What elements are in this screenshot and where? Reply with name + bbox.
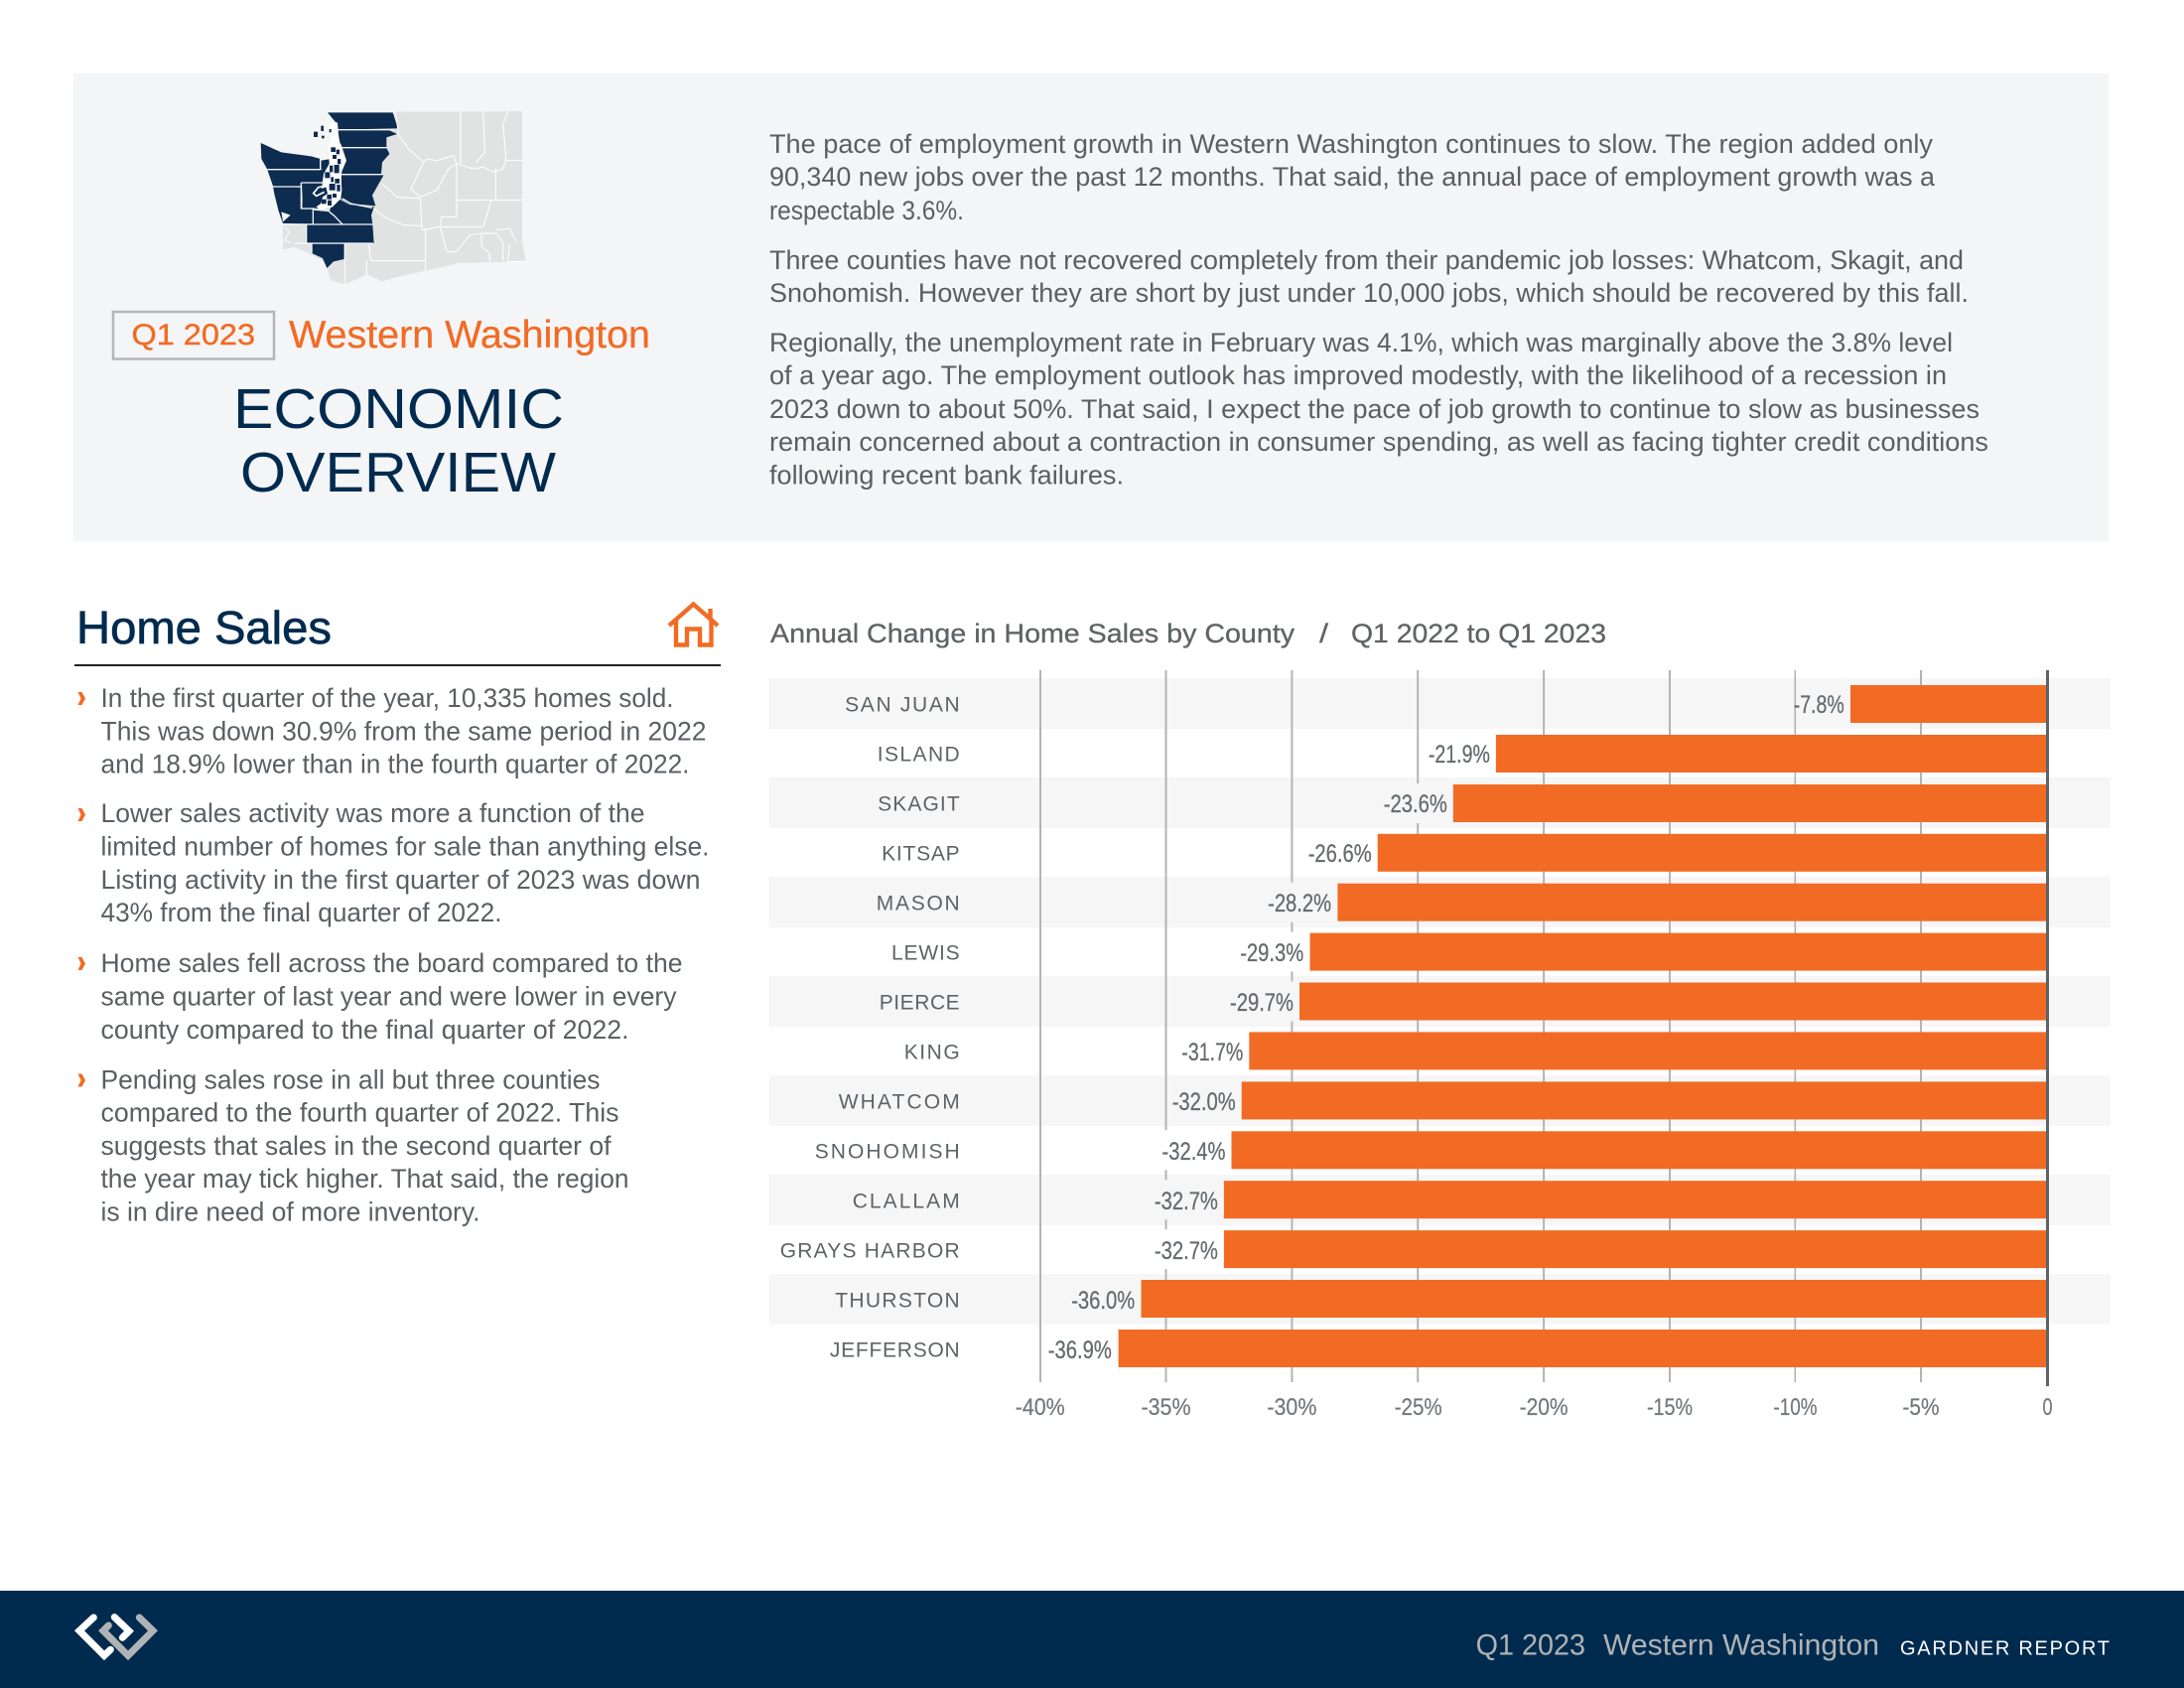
row: Clallam: -32.7% [1155, 1188, 1218, 1215]
bullet: first quarter sales: In the first quarter of the year, 10,335 homes sold. [101, 683, 673, 713]
row: Snohomish: SNOHOMISH [815, 1141, 960, 1164]
row: Lewis [891, 932, 2046, 972]
map: Washington counties with Western Washington highlighted [261, 111, 526, 284]
title: Economic Overview: OVERVIEW [240, 441, 556, 504]
row: San Juan: SAN JUAN [845, 694, 960, 717]
footer text: Q1 2023 [1476, 1629, 1585, 1662]
bullet: sales fell across the board: Home sales fell across the board compared to the [101, 948, 683, 978]
heading: chart title: Q1 2022 to Q1 2023 [1351, 619, 1606, 648]
bullet: sales fell across the board [77, 948, 683, 1045]
panel: economic overview header [73, 73, 2109, 541]
row: Whatcom: -32.0% [1172, 1088, 1236, 1116]
bullet: lower sales activity [77, 798, 709, 927]
title: Economic Overview [233, 377, 564, 504]
row: King: KING [904, 1042, 960, 1064]
row: Lewis: -29.3% [1240, 939, 1303, 967]
heading: chart title: Annual Change in Home Sales by County [770, 619, 1296, 648]
bullet: pending sales [77, 1064, 629, 1227]
bullet: pending sales: suggests that sales in the second quarter of [101, 1131, 612, 1161]
row: San Juan: -7.8% [1794, 691, 1844, 719]
chart axis labels: -20% [1520, 1394, 1569, 1421]
row: Skagit [878, 783, 2046, 823]
text block: employment summary [769, 129, 1988, 491]
heading: chart title: / [1319, 619, 1329, 648]
row: Island: ISLAND [878, 744, 960, 767]
row: Kitsap: -26.6% [1308, 840, 1372, 868]
footer text [1476, 1629, 2110, 1662]
row: Pierce: PIERCE [880, 992, 960, 1015]
chart axis labels: -5% [1902, 1394, 1940, 1421]
bullet: pending sales: is in dire need of more inventory. [101, 1197, 480, 1227]
bullet: lower sales activity: limited number of homes for sale than anything else. [101, 832, 709, 862]
bullet: sales fell across the board: county compared to the final quarter of 2022. [101, 1015, 629, 1045]
bullet: lower sales activity: Listing activity in the first quarter of 2023 was down [101, 865, 701, 895]
chart axis labels: 0 [2043, 1394, 2053, 1421]
row: Thurston: -36.0% [1071, 1287, 1135, 1315]
chart axis labels: -40% [1016, 1394, 1065, 1421]
text block: employment summary: remain concerned about a contraction in consumer spending, as well as facing tighter credit conditions [769, 427, 1988, 457]
chart axis labels [1016, 1394, 2053, 1421]
bullet: lower sales activity: 43% from the final quarter of 2022. [101, 898, 502, 927]
row: Thurston: THURSTON [835, 1290, 960, 1313]
bullet: pending sales: compared to the fourth quarter of 2022. This [101, 1098, 619, 1128]
bullet: first quarter sales [77, 683, 707, 778]
text block: employment summary: Three counties have not recovered completely from their pandemic job losses: Whatcom, Skagit, and [769, 245, 1964, 275]
row: Grays Harbor: -32.7% [1155, 1237, 1218, 1265]
footer text: GARDNER REPORT [1900, 1638, 2110, 1660]
text block: employment summary: respectable 3.6%. [769, 196, 964, 225]
heading: Western Washington: Western Washington [289, 314, 650, 356]
row: Kitsap: KITSAP [882, 843, 960, 866]
heading: chart title [770, 619, 1606, 648]
row: Lewis: LEWIS [891, 942, 960, 965]
row: Island [878, 734, 2046, 774]
badge: Q1 2023: Q1 2023 [131, 319, 255, 352]
row: Jefferson: JEFFERSON [830, 1339, 960, 1362]
icon: Windermere logo [79, 1618, 153, 1655]
icon: house [669, 604, 718, 645]
chart axis labels: -25% [1395, 1394, 1442, 1421]
row: Pierce [880, 981, 2046, 1021]
text block: home sales bullets [77, 683, 709, 1227]
row: Thurston [835, 1279, 2046, 1319]
row: King [904, 1031, 2046, 1070]
row: Skagit: SKAGIT [878, 793, 960, 816]
chart axis labels: -30% [1267, 1394, 1316, 1421]
text block: employment summary: 2023 down to about 50%. That said, I expect the pace of job growth to continue to slow as businesses [769, 394, 1979, 424]
row: Jefferson: -36.9% [1048, 1336, 1112, 1364]
footer text: Western Washington [1603, 1629, 1879, 1662]
footer band [0, 1591, 2184, 1688]
row: Pierce: -29.7% [1230, 989, 1294, 1017]
row: Clallam: CLALLAM [853, 1191, 960, 1213]
heading: Home Sales: Home Sales [76, 602, 332, 653]
bullet: pending sales: Pending sales rose in all but three counties [101, 1064, 600, 1094]
bullet: pending sales: the year may tick higher. That said, the region [101, 1164, 629, 1194]
row: Jefferson [830, 1329, 2046, 1368]
text block: employment summary: Regionally, the unemployment rate in February was 4.1%, which was marginally above the 3.8% level [769, 328, 1953, 357]
row: Grays Harbor [780, 1229, 2046, 1269]
row: Mason [877, 883, 2046, 922]
row: Island: -21.9% [1429, 741, 1490, 769]
text block: employment summary: 90,340 new jobs over the past 12 months. That said, the annual pace of employment growth was a [769, 162, 1935, 192]
badge: Q1 2023 [113, 312, 274, 359]
bullet: first quarter sales: and 18.9% lower than in the fourth quarter of 2022. [101, 749, 689, 778]
row: Whatcom [839, 1080, 2046, 1120]
row: Kitsap [882, 833, 2046, 873]
text block: employment summary: of a year ago. The employment outlook has improved modestly, with the likelihood of a recession in [769, 360, 1947, 390]
row: King: -31.7% [1181, 1039, 1243, 1066]
text block: employment summary: Snohomish. However they are short by just under 10,000 jobs, which should be recovered by this fall. [769, 278, 1969, 308]
bullet: sales fell across the board: same quarter of last year and were lower in every [101, 981, 677, 1011]
chart axis labels: -15% [1647, 1394, 1693, 1421]
text block: employment summary: The pace of employment growth in Western Washington continues to slow. The region added only [769, 129, 1934, 159]
row: San Juan [845, 684, 2046, 724]
bullet: first quarter sales: This was down 30.9% from the same period in 2022 [101, 717, 707, 747]
row: Snohomish: -32.4% [1161, 1138, 1225, 1166]
bar chart: annual change in home sales by county [769, 670, 2111, 1421]
row: Snohomish [815, 1130, 2046, 1170]
row: Clallam [853, 1180, 2046, 1219]
chart axis labels: -35% [1142, 1394, 1191, 1421]
chart axis labels: -10% [1773, 1394, 1817, 1421]
bullet: lower sales activity: Lower sales activity was more a function of the [101, 798, 645, 828]
title: Economic Overview: ECONOMIC [233, 377, 564, 441]
row: Skagit: -23.6% [1384, 790, 1447, 818]
row: Grays Harbor: GRAYS HARBOR [780, 1240, 960, 1263]
row: Whatcom: WHATCOM [839, 1091, 960, 1114]
row: Mason: MASON [877, 893, 960, 915]
text block: employment summary: following recent bank failures. [769, 461, 1124, 491]
row: Mason: -28.2% [1268, 890, 1331, 917]
